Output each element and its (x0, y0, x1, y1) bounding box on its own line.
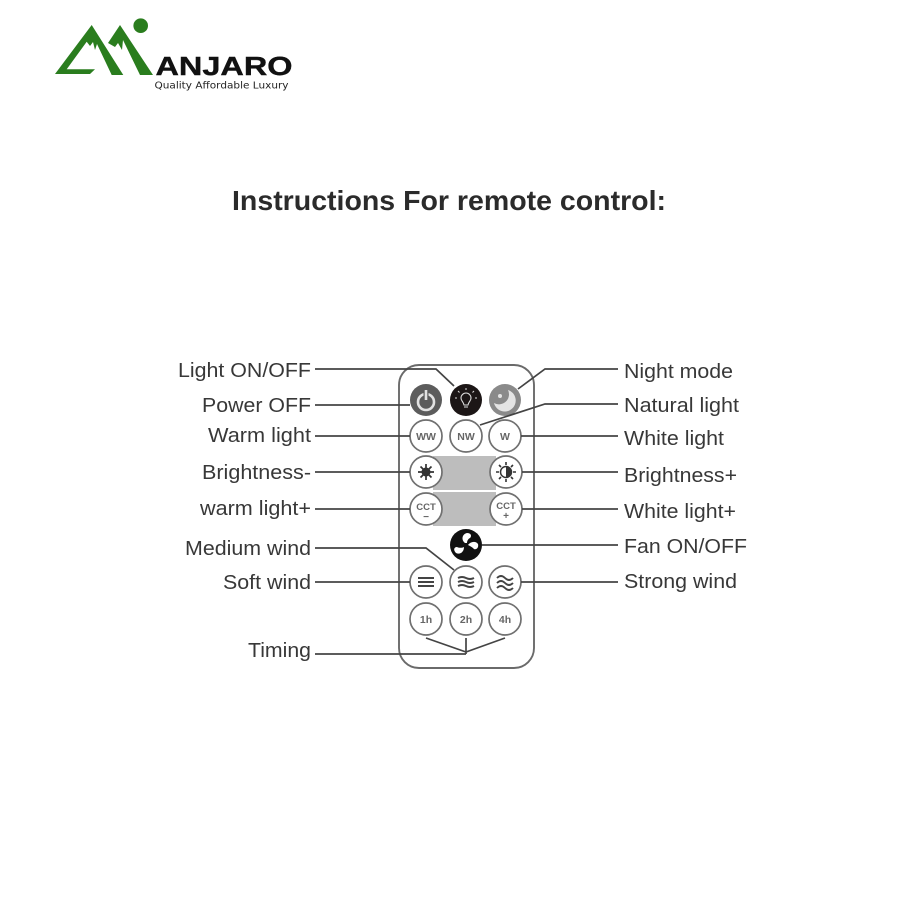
title: Instructions For remote control: (232, 185, 666, 216)
icon: green mountains (55, 18, 153, 75)
button: warm light plus (410, 493, 442, 525)
button: strong wind (489, 566, 521, 598)
button: night mode (489, 384, 521, 416)
right labels (624, 361, 747, 593)
label: White light+: White light+ (624, 501, 736, 523)
button: power off (410, 384, 442, 416)
button: 4h: 4h (499, 614, 511, 626)
label: White light: White light (624, 428, 724, 450)
logo wordmark: ANJARO (156, 51, 292, 81)
button: warm light plus: CCT (416, 502, 436, 513)
button: white light: W (500, 431, 510, 443)
button: natural light: NW (457, 431, 475, 443)
button: white light plus: + (503, 511, 509, 522)
logo (55, 18, 292, 92)
label: Natural light: Natural light (624, 395, 739, 417)
logo tagline: Quality Affordable Luxury (154, 80, 289, 92)
button: warm light (410, 420, 442, 452)
label: Warm light: Warm light (208, 425, 311, 447)
remote body (399, 365, 534, 668)
button: white light plus (490, 493, 522, 525)
button: brightness minus (410, 456, 442, 488)
button: 1h (410, 603, 442, 635)
gray panel: brightness (433, 456, 496, 490)
button: 4h (489, 603, 521, 635)
label: Light ON/OFF: Light ON/OFF (178, 360, 311, 382)
button: brightness plus (490, 456, 522, 488)
remote control diagram (399, 365, 534, 668)
left labels (178, 360, 311, 662)
label: Medium wind: Medium wind (185, 538, 311, 560)
button: white light (489, 420, 521, 452)
leader lines (315, 369, 618, 654)
button: warm light: WW (416, 431, 436, 443)
label: Timing: Timing (248, 640, 311, 662)
button: white light plus: CCT (496, 501, 516, 512)
button: warm light plus: − (423, 512, 429, 523)
label: Brightness-: Brightness- (202, 462, 311, 484)
button: 2h: 2h (460, 614, 472, 626)
button: soft wind (410, 566, 442, 598)
label: Strong wind: Strong wind (624, 571, 737, 593)
button: 2h (450, 603, 482, 635)
button: fan on/off (450, 529, 482, 561)
gray panel: colour temperature (433, 492, 496, 526)
button: medium wind (450, 566, 482, 598)
label: Night mode: Night mode (624, 361, 733, 383)
button: light on/off (450, 384, 482, 416)
label: warm light+: warm light+ (199, 498, 311, 520)
label: Brightness+: Brightness+ (624, 465, 737, 487)
label: Fan ON/OFF: Fan ON/OFF (624, 536, 747, 558)
label: Power OFF: Power OFF (202, 395, 311, 417)
button: 1h: 1h (420, 614, 432, 626)
button: natural light (450, 420, 482, 452)
label: Soft wind: Soft wind (223, 572, 311, 594)
